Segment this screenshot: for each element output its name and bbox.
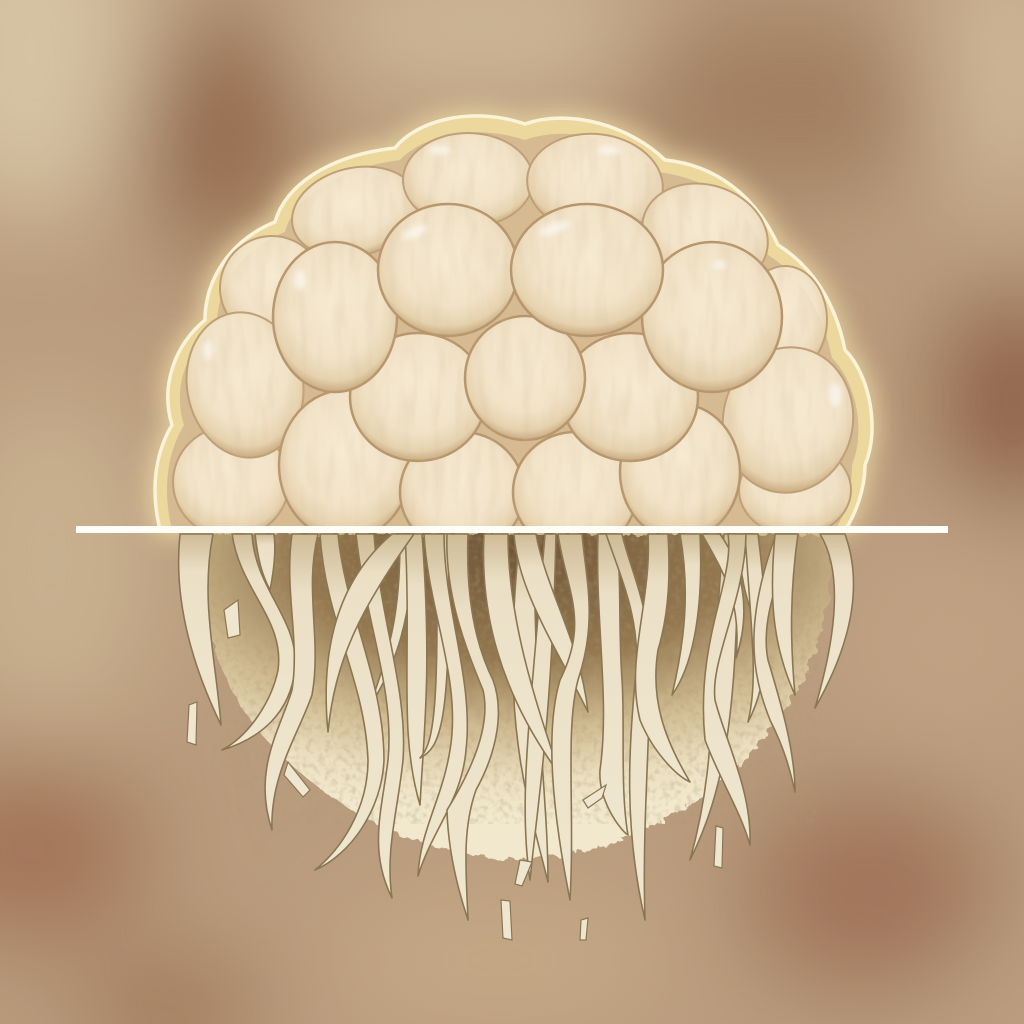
lobe fibre texture xyxy=(216,136,815,510)
dome xyxy=(150,116,880,552)
roots xyxy=(179,534,854,920)
dome outer membrane xyxy=(155,116,872,530)
root strands, front layer xyxy=(179,534,854,920)
inner base shadow xyxy=(167,132,858,530)
root strands, back layer xyxy=(255,534,766,882)
horizontal white divider line xyxy=(76,526,948,533)
lobe highlights xyxy=(203,146,841,407)
back lobes xyxy=(173,127,865,538)
glow hugging dome xyxy=(155,116,872,530)
front lobes xyxy=(273,204,782,552)
root mass backing disc xyxy=(198,534,832,858)
debris fragments xyxy=(187,600,723,940)
